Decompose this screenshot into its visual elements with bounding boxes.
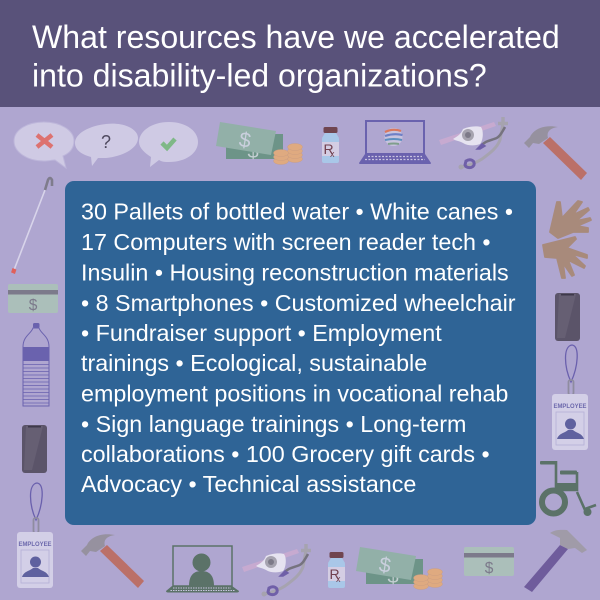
icon: wheelchair	[540, 461, 596, 516]
icon: smartphone left	[22, 425, 47, 473]
title	[32, 19, 560, 94]
icon: cash and coins top	[216, 122, 302, 164]
icon: hammer bottom left	[81, 534, 144, 588]
resource list text: trainings • Ecological, sustainable	[81, 350, 427, 376]
icon: assistive device bottom	[242, 544, 311, 596]
icon: hammer bottom right	[524, 530, 587, 592]
resource list text: 30 Pallets of bottled water • White canes •	[81, 198, 513, 224]
icon: gift card bottom	[464, 547, 514, 577]
icon: insulin vial bottom	[328, 552, 345, 588]
icon: sign language hands	[543, 201, 591, 278]
icon: water bottle	[23, 323, 49, 406]
panel: resource list	[65, 181, 536, 525]
icon: employee badge bottom left	[17, 483, 53, 588]
icon: gift card left	[8, 284, 58, 314]
resource list text: employment positions in vocational rehab	[81, 380, 508, 406]
icon: employee badge right	[552, 345, 588, 450]
icon: laptop with globe	[359, 121, 431, 164]
header band	[0, 0, 600, 107]
icon: white cane	[12, 178, 52, 273]
resource list text: • Sign language trainings • Long-term	[81, 411, 466, 437]
resource list text: Insulin • Housing reconstruction materials	[81, 260, 509, 286]
icon: insulin vial top	[322, 127, 339, 163]
icon: smartphone right	[555, 293, 580, 341]
resource list text: collaborations • 100 Grocery gift cards •	[81, 441, 490, 467]
icon: speech bubbles	[14, 122, 198, 168]
resource list text: Advocacy • Technical assistance	[81, 471, 416, 497]
resource list text: • 8 Smartphones • Customized wheelchair	[81, 290, 516, 316]
resource list text: • Fundraiser support • Employment	[81, 320, 442, 346]
icon: assistive device top	[439, 117, 508, 170]
icon: hammer top right	[524, 126, 587, 180]
icon: speech bubbles: ?	[101, 132, 111, 152]
icon: cash and coins bottom	[356, 547, 442, 590]
icon: laptop with person	[166, 546, 239, 592]
resource list text	[81, 198, 516, 497]
resource list text: 17 Computers with screen reader tech •	[81, 229, 491, 255]
title: What resources have we accelerated	[32, 19, 560, 55]
title: into disability-led organizations?	[32, 58, 487, 94]
